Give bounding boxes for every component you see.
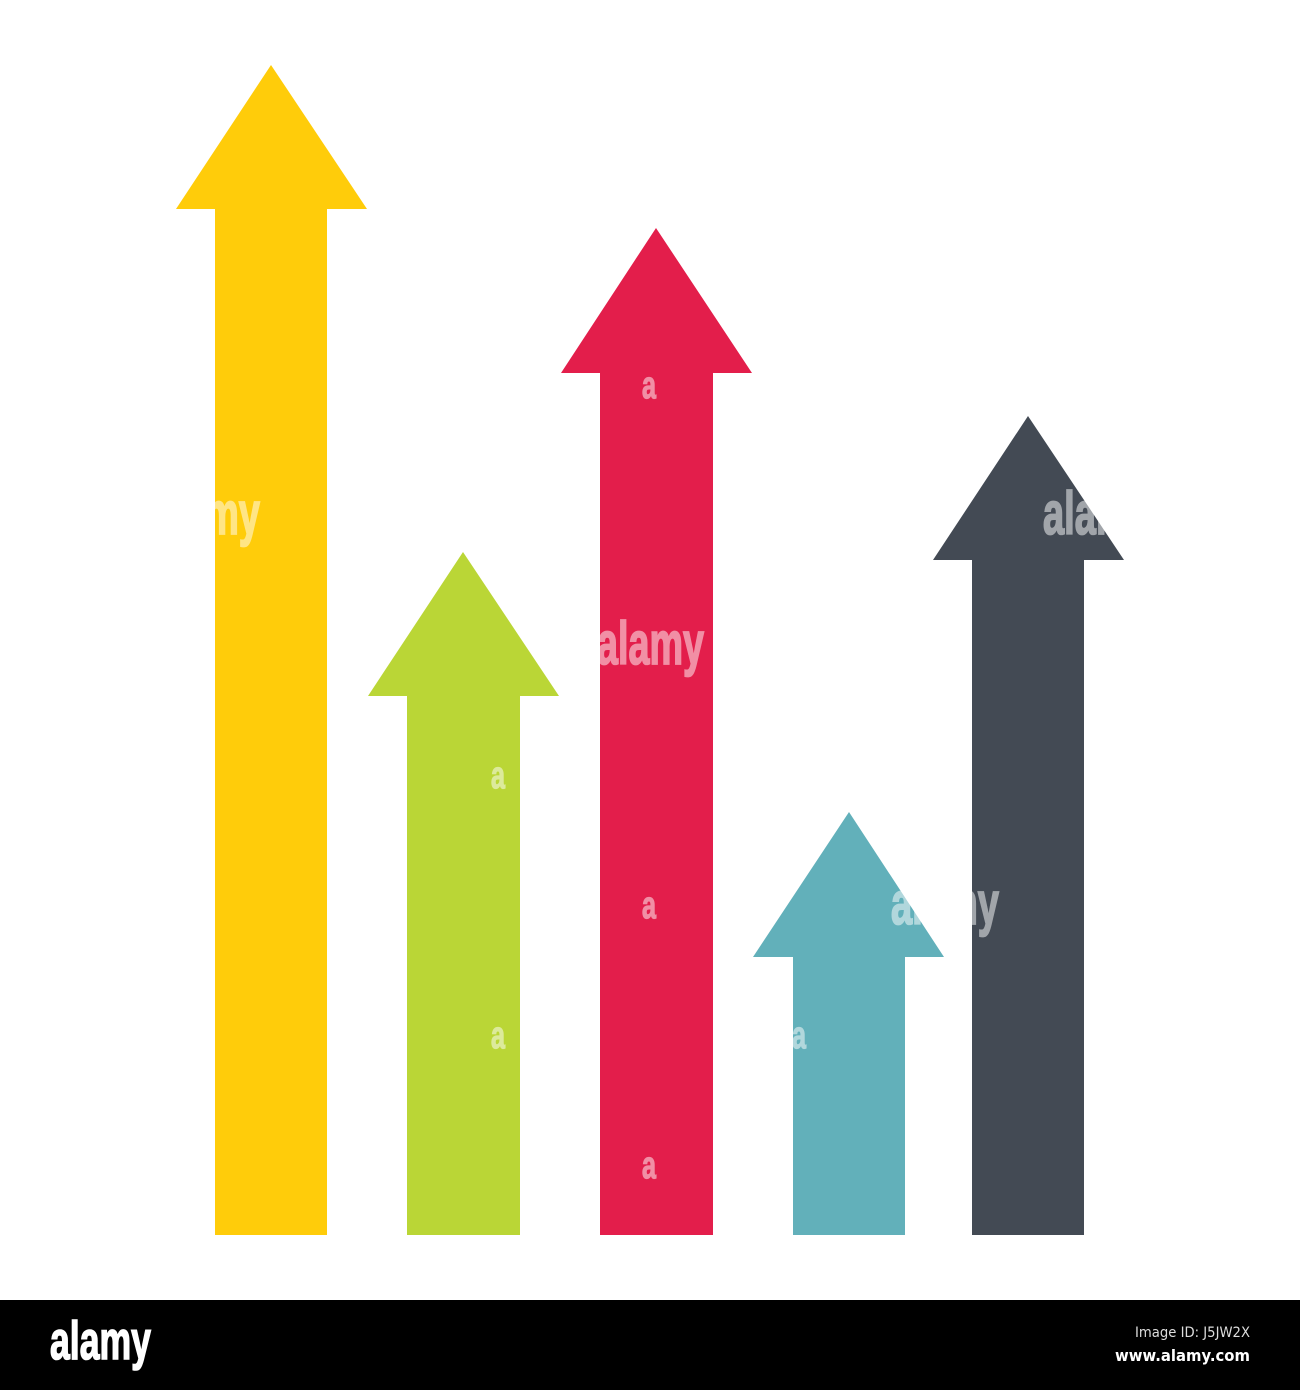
watermark: alamy text over arrows: alamy xyxy=(891,870,999,937)
watermark: alamy text over arrows: a xyxy=(491,1015,506,1057)
arrow: teal xyxy=(753,812,944,1235)
watermark: alamy text over arrows: alamy xyxy=(1043,480,1151,547)
watermark: alamy text over arrows: a xyxy=(491,755,506,797)
watermark: alamy text over arrows: a xyxy=(642,1145,657,1187)
watermark: alamy text over arrows: a xyxy=(642,365,657,407)
watermark: alamy text over arrows xyxy=(152,365,1151,1187)
watermark: alamy text over arrows: a xyxy=(642,885,657,927)
footer bar xyxy=(0,1300,1300,1390)
watermark: alamy text over arrows: a xyxy=(792,1015,807,1057)
footer logo: alamy xyxy=(50,1311,151,1371)
watermark: alamy text over arrows: alamy xyxy=(597,610,704,677)
arrow: green xyxy=(368,552,559,1235)
footer image id: Image ID: J5JW2X xyxy=(1135,1325,1250,1341)
footer url: www.alamy.com xyxy=(1115,1346,1250,1365)
arrow: yellow xyxy=(176,65,367,1235)
watermark: alamy text over arrows: alamy xyxy=(152,480,260,547)
arrow: dark slate xyxy=(933,416,1124,1235)
arrow: red xyxy=(561,228,752,1235)
